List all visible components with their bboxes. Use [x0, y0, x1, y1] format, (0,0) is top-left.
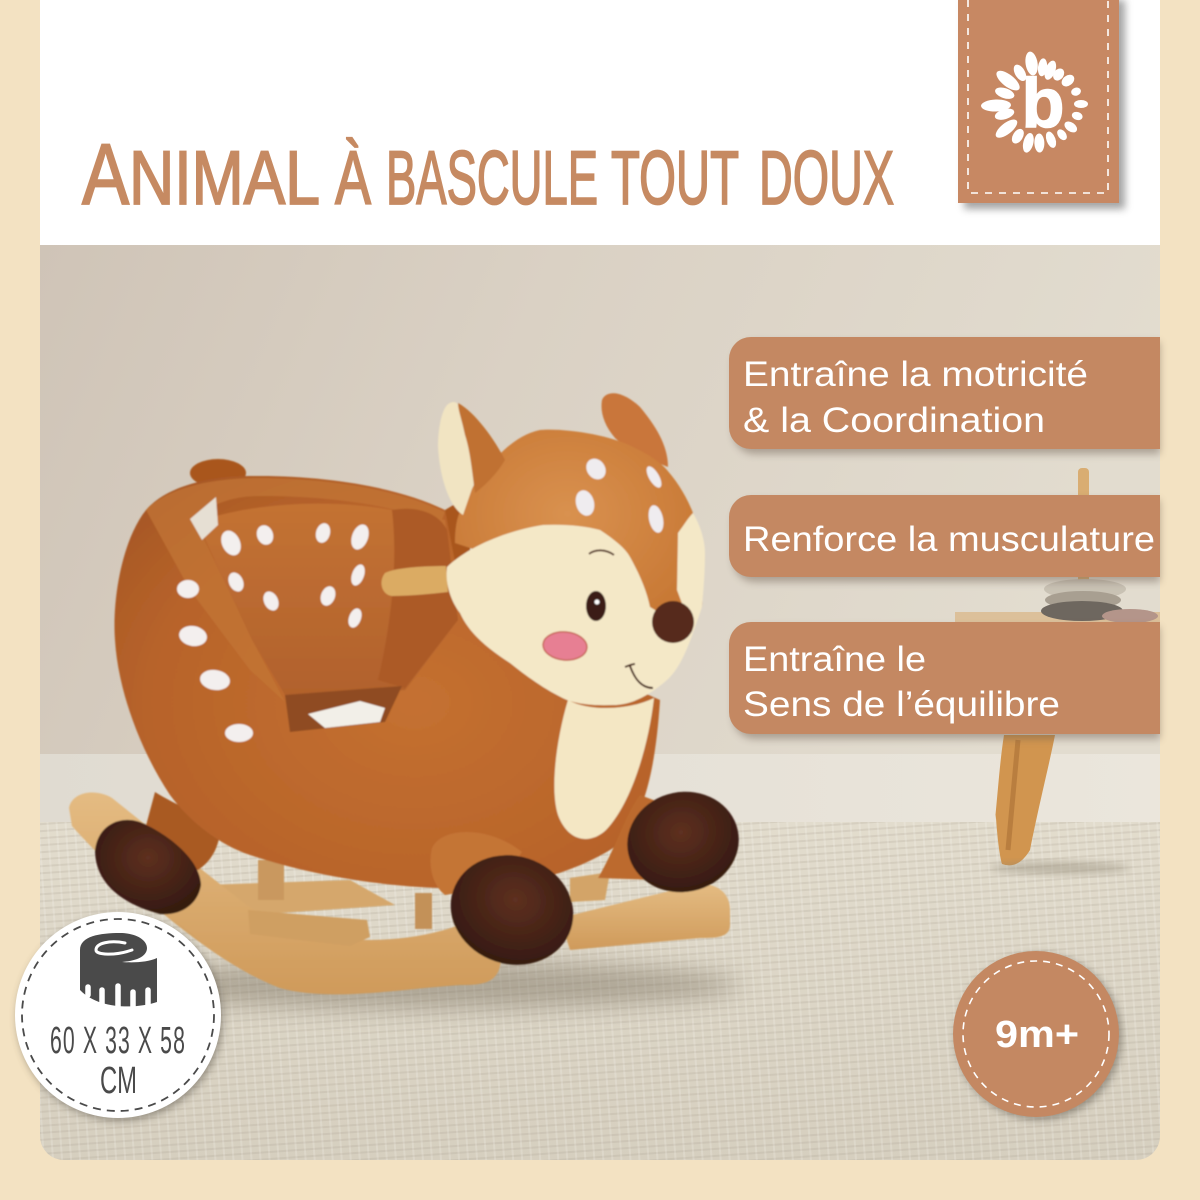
baseboard [40, 754, 1160, 824]
wall [40, 245, 1160, 760]
white header band [40, 0, 1160, 246]
back of head shade [444, 504, 471, 560]
tab stitching [968, 0, 1108, 193]
far side of face [677, 513, 705, 633]
eye [586, 591, 606, 621]
chest patch [554, 698, 654, 839]
smile [625, 664, 653, 688]
wooden footrest [249, 911, 371, 941]
benefit pill: musculature: Renforce la musculature [743, 520, 1155, 559]
title: BASCULE [386, 136, 598, 221]
eyebrow [589, 550, 614, 555]
benefit pill: équilibre [729, 622, 1160, 739]
tab [958, 0, 1119, 203]
tail [190, 459, 246, 487]
benefit pill: motricité: Entraîne la motricité [743, 355, 1088, 394]
icon: sunflower logo: b [1022, 64, 1064, 142]
dimensions text: 60 X 33 X 58 [50, 1020, 186, 1062]
rocker shadow on carpet [120, 961, 740, 1009]
wooden crossbars [205, 860, 610, 929]
right ear [602, 393, 668, 467]
plush deer rocker [69, 393, 748, 994]
left ear [438, 402, 505, 515]
head [454, 428, 694, 611]
age badge: 9m+ [995, 1014, 1079, 1056]
product photo [40, 245, 1160, 1162]
front leg [431, 832, 522, 895]
body [114, 476, 660, 888]
title: DOUX [759, 136, 894, 221]
benefit pill: équilibre: Entraîne le [743, 640, 926, 679]
back foot [95, 820, 201, 914]
side table with toy stack [955, 468, 1160, 874]
front wooden rocker [69, 793, 501, 994]
benefit pill: musculature [729, 495, 1160, 582]
white fabric tag [190, 497, 218, 540]
buckle [308, 701, 385, 728]
cheek [542, 630, 588, 662]
title [82, 127, 894, 223]
dimensions badge [15, 912, 223, 1121]
front foot [450, 854, 574, 966]
brand label tab [958, 0, 1125, 209]
tab shadow [964, 0, 1125, 209]
age badge [953, 951, 1122, 1120]
right foot [626, 790, 740, 894]
icon: tape measure [80, 933, 157, 1009]
unit text: CM [100, 1060, 137, 1102]
cream face [447, 525, 693, 705]
back leg [140, 792, 220, 870]
benefit pill: équilibre: Sens de l’équilibre [743, 685, 1060, 724]
nose [652, 601, 694, 643]
benefit pill: motricité: & la Coordination [743, 401, 1045, 440]
right leg [598, 796, 654, 880]
carpet [40, 822, 1160, 1162]
benefit pill: motricité [729, 337, 1160, 454]
title: ANIMAL [82, 127, 320, 223]
antler [381, 566, 448, 596]
seat interior [197, 504, 458, 732]
title: À [335, 136, 371, 221]
white spots [177, 522, 372, 742]
icon: sunflower logo [981, 51, 1088, 154]
rear wooden rocker [560, 884, 730, 950]
title: TOUT [611, 136, 739, 221]
head white spots [573, 455, 666, 534]
chair rim highlight [146, 478, 445, 702]
